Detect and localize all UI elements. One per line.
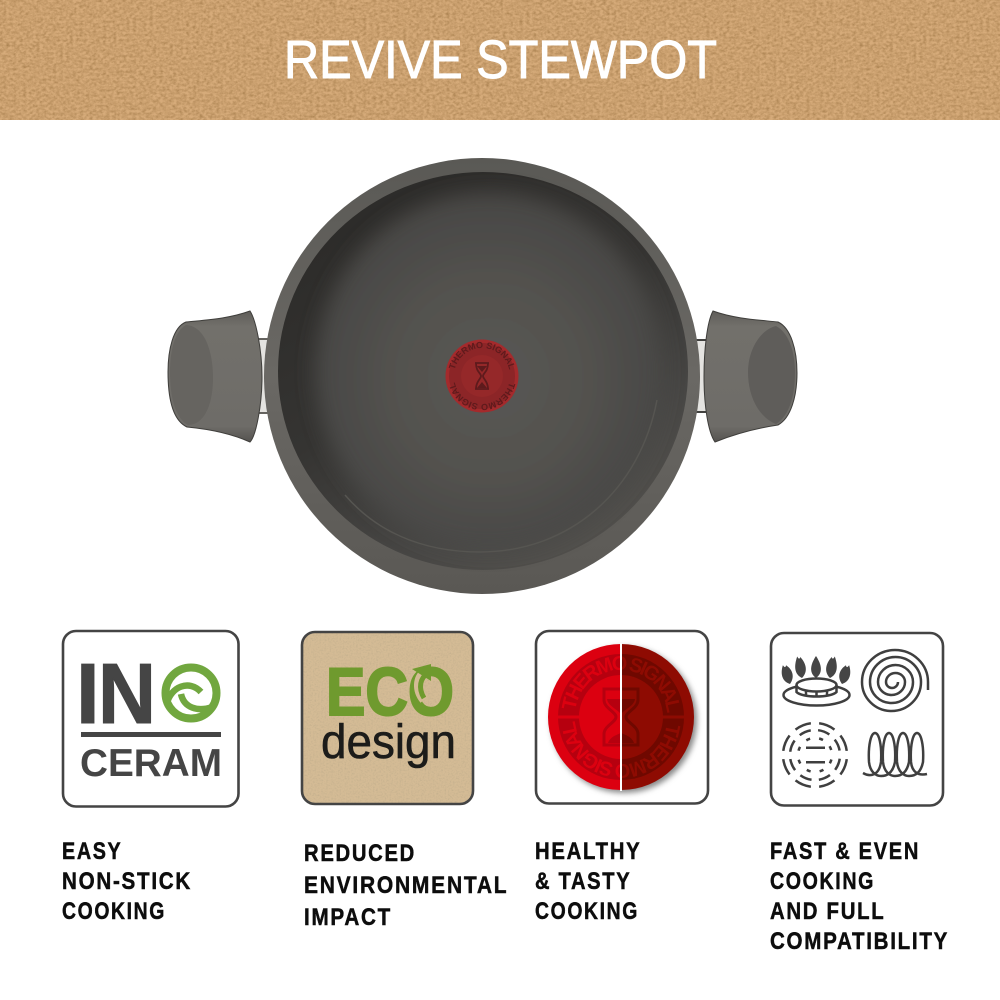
caption: easy non-stick cooking: NON-STICK bbox=[62, 868, 192, 895]
caption: fast and even cooking and full compatibility: COMPATIBILITY bbox=[770, 928, 949, 955]
thermo signal spot bbox=[446, 340, 518, 412]
caption: fast and even cooking and full compatibility: COOKING bbox=[770, 868, 875, 895]
badge: Thermo-Signal bbox=[534, 630, 710, 805]
caption: healthy and tasty cooking: HEALTHY bbox=[535, 838, 641, 865]
caption: reduced environmental impact: ENVIRONMENTAL bbox=[304, 872, 508, 899]
red half disc bbox=[548, 644, 620, 790]
pot inner wall bbox=[278, 172, 688, 570]
caption: healthy and tasty cooking: COOKING bbox=[535, 898, 639, 925]
header banner bbox=[0, 0, 1000, 120]
caption: easy non-stick cooking: EASY bbox=[62, 838, 122, 865]
dark half disc: THERMO SIGNAL bbox=[622, 656, 679, 713]
floor ridge bbox=[345, 400, 657, 552]
logo letter I: I bbox=[76, 647, 100, 742]
icon: spiral induction bbox=[862, 650, 928, 711]
right handle bbox=[696, 311, 797, 442]
caption: fast and even cooking and full compatibility: AND FULL bbox=[770, 898, 885, 925]
badge: Inoceram bbox=[63, 631, 238, 806]
icon: electric coil bbox=[863, 733, 927, 776]
green swirl icon bbox=[166, 668, 216, 718]
icon: gas burner bbox=[779, 655, 853, 706]
stewpot illustration bbox=[168, 158, 798, 594]
logo word design: design bbox=[321, 716, 456, 769]
left handle bbox=[168, 311, 269, 442]
caption: reduced environmental impact: IMPACT bbox=[304, 904, 392, 931]
caption: healthy and tasty cooking: & TASTY bbox=[535, 868, 631, 895]
logo letter N: N bbox=[98, 647, 156, 742]
caption: fast and even cooking and full compatibility: FAST & EVEN bbox=[770, 838, 920, 865]
caption: reduced environmental impact: REDUCED bbox=[304, 840, 416, 867]
red half disc: THERMO SIGNAL bbox=[562, 721, 620, 778]
thermo signal spot: THERMO SIGNAL bbox=[448, 342, 514, 370]
caption: easy non-stick cooking: COOKING bbox=[62, 898, 166, 925]
logo word ECO: ECO bbox=[326, 654, 454, 730]
logo word CERAM: CERAM bbox=[80, 742, 222, 785]
badge: Eco design bbox=[302, 632, 473, 804]
red half disc: THERMO SIGNAL bbox=[562, 656, 620, 708]
pot floor bbox=[315, 192, 663, 550]
dark half disc: THERMO SIGNAL bbox=[622, 726, 680, 778]
icon: radiant hob bbox=[783, 723, 847, 787]
badge: hob compatibility bbox=[771, 633, 943, 806]
thermo signal spot: THERMO SIGNAL bbox=[450, 382, 516, 410]
dark half disc bbox=[622, 644, 694, 790]
pot rim bbox=[264, 158, 700, 594]
recycle arrow bbox=[412, 664, 431, 700]
title: REVIVE STEWPOT bbox=[284, 30, 717, 90]
